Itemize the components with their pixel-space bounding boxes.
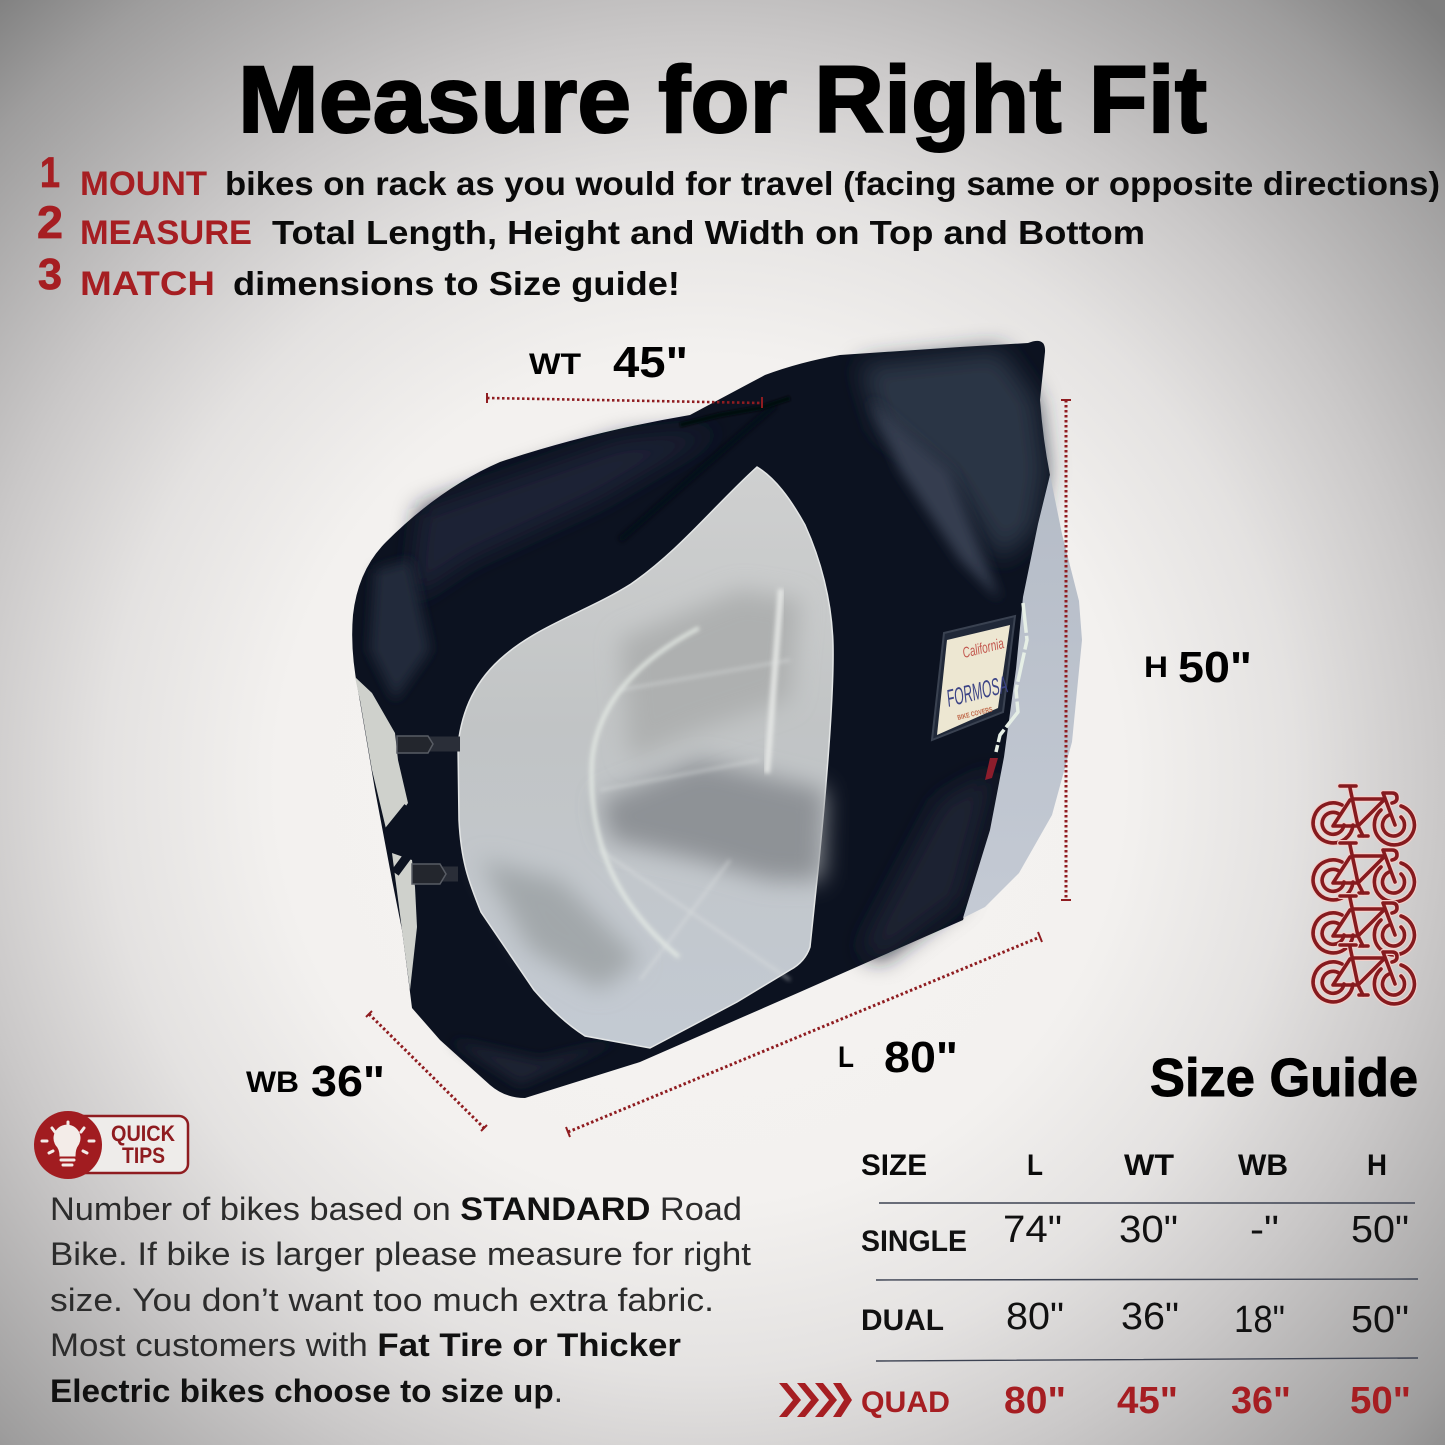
bag body [352,341,1050,1098]
table header: L [1027,1149,1043,1182]
label: L 80 [838,1033,958,1082]
row: quad highlighted: 80" [1004,1380,1066,1422]
bag folds [370,350,1045,1085]
dimension line: WB [366,1011,487,1131]
label: L 80: 80" [884,1033,958,1082]
vertical brand stripe [996,603,1027,752]
formosa license plate: FORMOSA [946,671,1009,713]
step 1: MOUNT [80,165,207,203]
table header: SIZE [861,1149,927,1182]
icon: light bulb [42,1122,94,1165]
formosa license plate [932,616,1015,740]
row: single [861,1209,1409,1258]
quick tips badge [34,1111,188,1179]
label: H 50 [1144,643,1252,692]
row: single: 30" [1119,1209,1178,1251]
row: dual: 80" [1006,1296,1064,1338]
formosa license plate: California [961,635,1006,662]
table header: WB [1238,1149,1288,1182]
title: Measure for Right Fit [238,47,1207,153]
quick tips text: Most customers with Fat Tire or Thicker [50,1327,681,1363]
front mesh panel [458,467,833,1048]
row: dual: 18" [1234,1299,1285,1341]
step 1: 1 [40,149,60,197]
row: quad highlighted [861,1380,1411,1422]
quick tips text [50,1191,751,1409]
label: WT 45: 45" [613,338,688,387]
quick tips badge: QUICK [111,1121,175,1146]
row: quad highlighted: 50" [1350,1380,1411,1422]
label: L 80: L [838,1041,854,1074]
table header: WT [1124,1149,1174,1182]
step 3 [38,250,680,303]
step 2: Total Length, Height and Width on Top and Bottom [272,214,1145,251]
row: quad highlighted: 36" [1231,1380,1291,1422]
row: quad highlighted: 45" [1117,1380,1178,1422]
left mesh panel [355,677,417,990]
dimension line: L [566,932,1042,1137]
row: single: -" [1250,1209,1279,1251]
quick tips text: size. You don’t want too much extra fabric. [50,1282,714,1318]
quick tips text: Number of bikes based on STANDARD Road [50,1191,742,1227]
step 2: 2 [37,197,63,248]
label: WB 36: 36" [311,1057,385,1106]
bag photo [352,341,1082,1098]
row: single: SINGLE [861,1225,967,1258]
label: WT 45 [529,338,688,387]
step 3: 3 [38,250,62,299]
label: WB 36: WB [246,1066,299,1099]
icon: four stacked bikes [1313,786,1414,1004]
row: dual: 50" [1351,1299,1409,1341]
quick tips text: Electric bikes choose to size up . [50,1373,563,1409]
step 3: MATCH [80,265,215,303]
label: WB 36 [246,1057,385,1106]
dimension line: H [1061,400,1071,900]
step 2 [37,197,1145,252]
label: WT 45: WT [529,348,581,381]
label: H 50: H [1144,651,1168,684]
brand logo mark [985,758,998,780]
label: H 50: 50" [1178,643,1252,692]
step 1: bikes on rack as you would for travel (facing same or opposite directions) [225,165,1440,202]
row: dual: DUAL [861,1304,944,1337]
row: dual: 36" [1121,1296,1179,1338]
row: quad highlighted: QUAD [861,1386,950,1419]
size guide heading: Size Guide [1150,1048,1418,1108]
right mesh panel [963,475,1082,918]
step 3: dimensions to Size guide! [233,265,680,302]
step 2: MEASURE [80,214,252,252]
icon: chevrons pointing to quad [779,1383,852,1417]
dimension line: WT [487,393,762,408]
table header: H [1367,1149,1387,1182]
step 1 [40,149,1440,203]
quick tips badge: TIPS [122,1143,165,1168]
buckles and straps [387,736,460,884]
row: single: 50" [1351,1209,1409,1251]
table header [861,1149,1387,1182]
instructions [37,149,1440,303]
row: dual [861,1296,1409,1341]
formosa license plate: BIKE COVERS [957,706,994,722]
size table [779,1149,1418,1422]
row: single: 74" [1003,1209,1062,1251]
quick tips text: Bike. If bike is larger please measure for right [50,1236,751,1272]
